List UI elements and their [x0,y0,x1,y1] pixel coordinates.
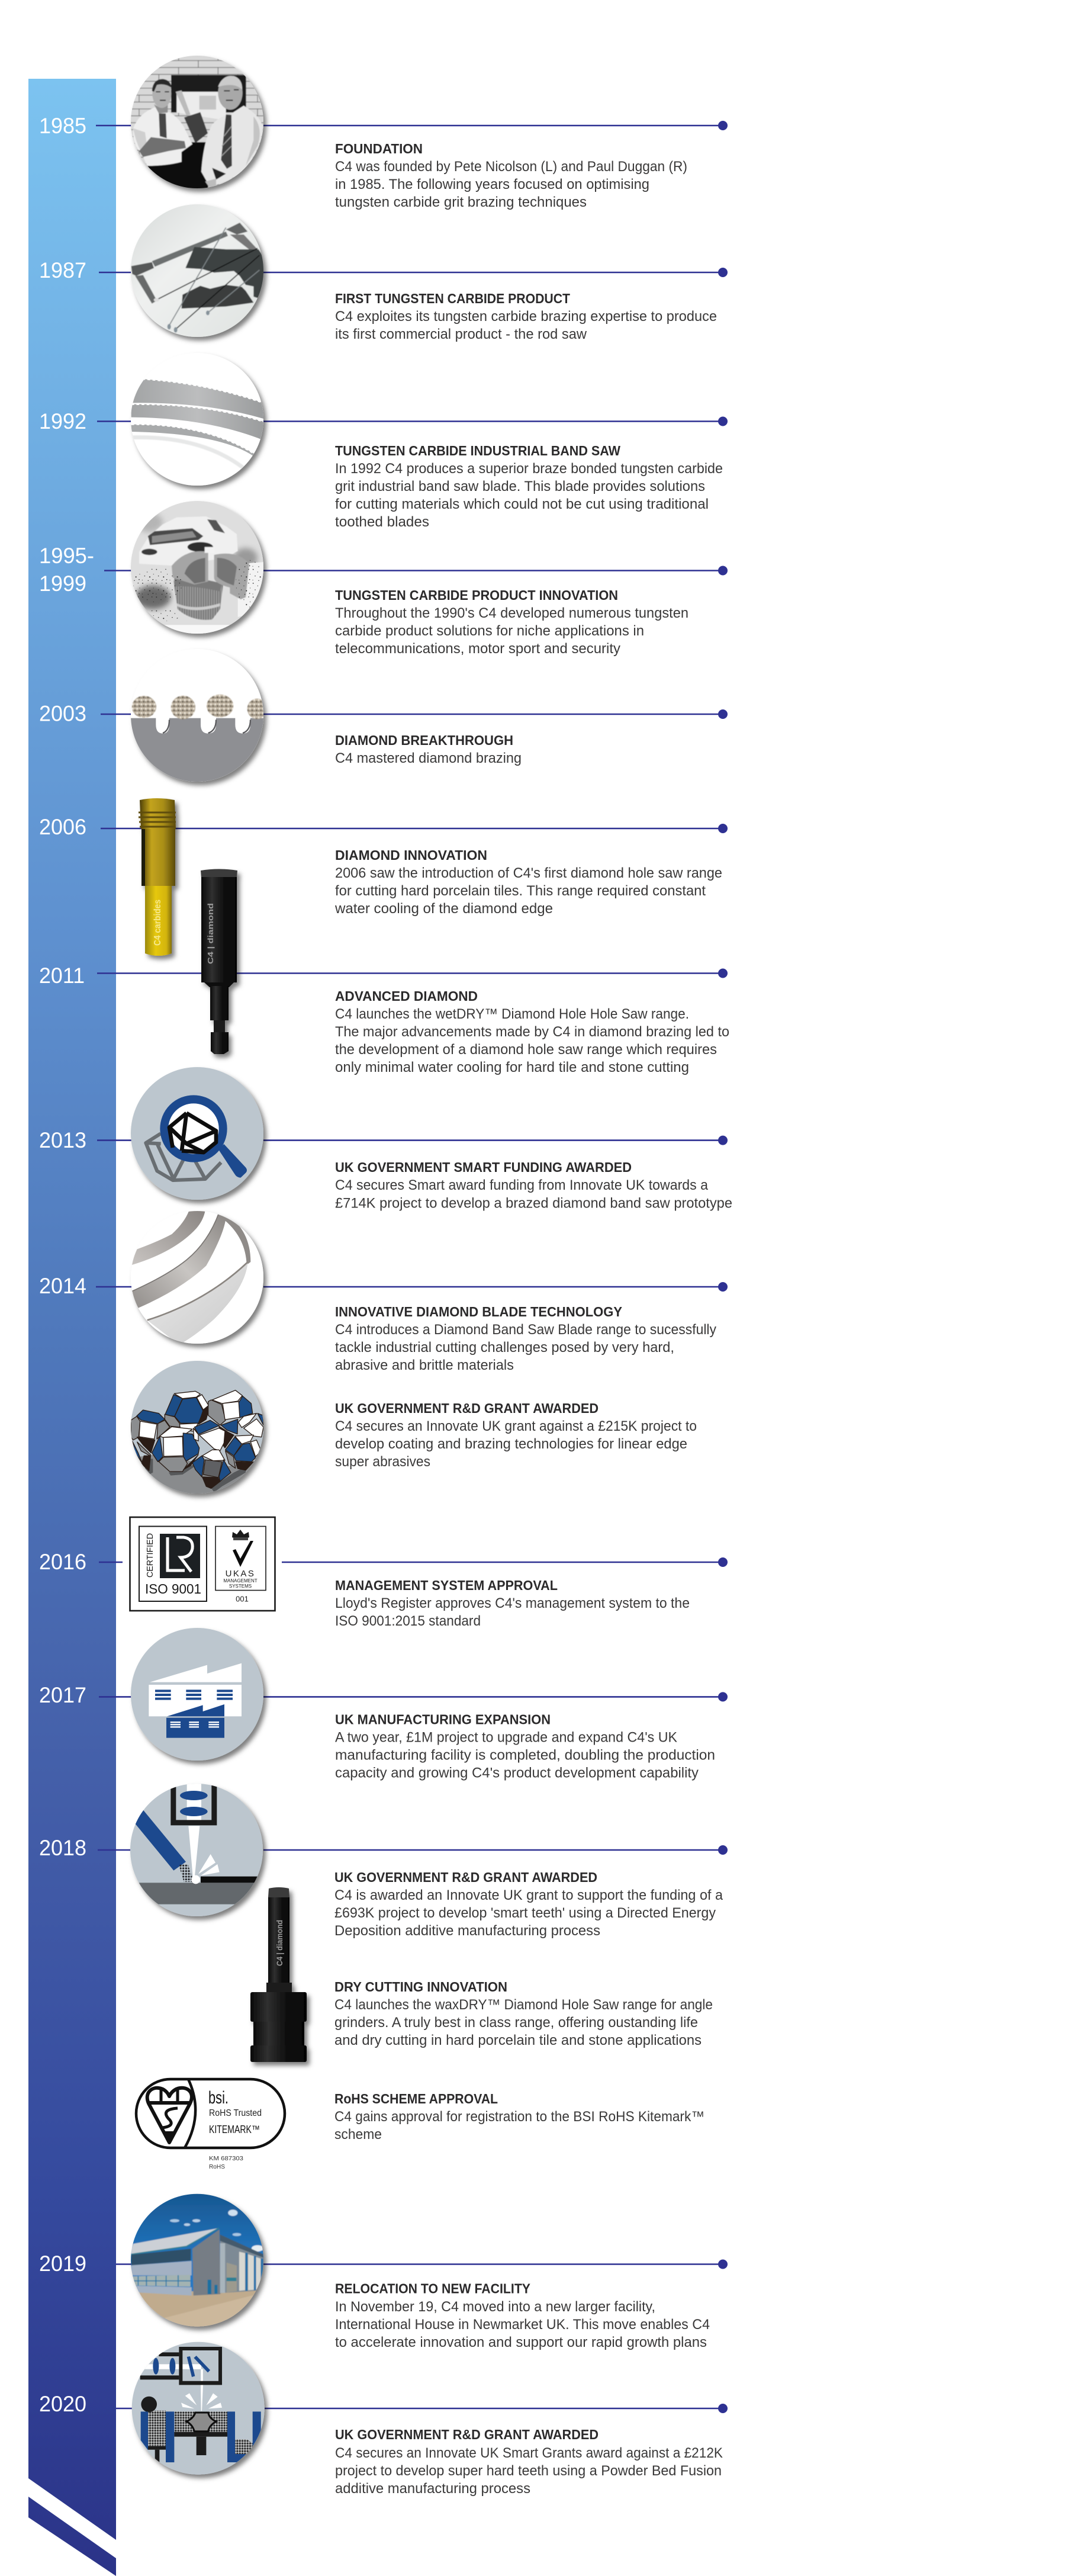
connector line 2013 [97,1136,728,1145]
body: C4 secures Smart award funding from Innovate UK towards a [335,1177,709,1193]
body [335,1418,697,1470]
body: in 1985. The following years focused on optimising [335,176,649,192]
body: ISO 9001:2015 standard [335,1613,481,1629]
icon: black diamond hole saw: C4 | diamond [206,903,215,964]
entry: 2006 diamond innovation [39,798,728,956]
body [335,1177,732,1212]
photo: founders [127,53,269,195]
entry: 1987 rod saw [39,202,728,344]
photo: International House building [127,2192,269,2334]
connector line 1987 [99,268,728,277]
body: Throughout the 1990's C4 developed numerous tungsten [335,605,688,621]
logo: UKAS: 001 [236,1594,249,1604]
body: project to develop super hard teeth using a Powder Bed Fusion [335,2463,722,2479]
entry: 2020 powder bed fusion [39,2340,728,2497]
body: manufacturing facility is completed, doubling the production [335,1747,715,1764]
connector line 2003 [101,709,728,719]
connector line 2017 [99,1692,728,1701]
year 2019: 2019 [39,2251,86,2276]
heading: UK GOVERNMENT R&D GRANT AWARDED [334,1870,597,1885]
text block: R&D grant super hard teeth [335,2427,723,2497]
photo: band saw blades [127,351,269,493]
logo: BSI RoHS Kitemark: KITEMARK™ [209,2124,260,2135]
logo: BSI RoHS Kitemark: RoHS Trusted [209,2108,262,2118]
logo: Lloyd's Register ISO 9001: CERTIFIED [146,1533,155,1578]
year 2020: 2020 [39,2392,86,2416]
heading: DIAMOND INNOVATION [335,847,487,863]
connector line 2019 [116,2260,728,2269]
heading: DIAMOND BREAKTHROUGH [335,733,513,748]
logo: UKAS: UKAS [226,1569,255,1579]
heading: RoHS SCHEME APPROVAL [334,2091,498,2106]
connector line 2014 [96,1282,728,1292]
body: telecommunications, motor sport and security [335,641,620,657]
body: for cutting hard porcelain tiles. This range required constant [335,883,706,899]
logo: UKAS [215,1527,266,1604]
heading: FOUNDATION [335,141,423,156]
body: grit industrial band saw blade. This blade provides solutions [335,478,705,494]
body: tackle industrial cutting challenges posed by very hard, [335,1340,674,1356]
body: The major advancements made by C4 in diamond brazing led to [335,1024,729,1040]
body: toothed blades [335,514,429,530]
connector line 1985 [96,121,728,130]
body: C4 introduces a Diamond Band Saw Blade range to sucessfully [335,1322,716,1338]
body: additive manufacturing process [335,2481,530,2497]
logo: UKAS: MANAGEMENT [223,1578,258,1583]
body: Deposition additive manufacturing process [334,1923,600,1939]
heading: TUNGSTEN CARBIDE INDUSTRIAL BAND SAW [335,443,621,458]
text block: diamond innovation [334,847,722,917]
body: International House in Newmarket UK. This move enables C4 [335,2317,710,2333]
connector line 2018 [98,1845,728,1855]
logo: BSI RoHS Kitemark: bsi. [208,2088,229,2108]
entry: 2013 smart funding [39,1065,732,1212]
text block: RoHS scheme approval [334,2091,704,2143]
year 2017: 2017 [39,1683,86,1707]
year 1995-1999 [39,544,94,596]
body: C4 secures an Innovate UK grant against a £215K project to [335,1418,697,1434]
body: super abrasives [335,1454,430,1470]
body: C4 launches the wetDRY™ Diamond Hole Hole Saw range. [335,1006,689,1022]
body: C4 is awarded an Innovate UK grant to support the funding of a [334,1887,723,1903]
year 1992: 1992 [39,409,86,433]
body: C4 mastered diamond brazing [335,750,522,766]
heading: UK MANUFACTURING EXPANSION [335,1711,551,1727]
text block: relocation [335,2281,710,2350]
entry: 2019 relocation [39,2192,728,2350]
entry: 2014 diamond blade technology [39,1209,728,1373]
logo: Lloyd's Register ISO 9001 [139,1527,207,1601]
body [335,2445,723,2497]
icon: waxDRY hole saw [250,1887,307,2062]
year 2014: 2014 [39,1274,86,1298]
body [334,1887,723,1939]
year 2016: 2016 [39,1550,86,1574]
icon: black diamond hole saw [201,869,237,1054]
text block: manufacturing expansion [335,1711,715,1781]
icon: diamond crystals [127,1354,269,1502]
text block: management system approval [335,1578,690,1629]
text block: diamond breakthrough [335,733,522,766]
year 1995-1999: 1999 [39,571,86,596]
body: tungsten carbide grit brazing techniques [335,194,587,210]
heading: MANAGEMENT SYSTEM APPROVAL [335,1578,558,1593]
body [335,309,717,342]
body: develop coating and brazing technologies for linear edge [335,1436,687,1452]
entry: 1985 foundation [39,53,728,210]
body: A two year, £1M project to upgrade and expand C4's UK [335,1729,677,1746]
year 2003: 2003 [39,701,86,726]
icon: powder bed fusion [128,2340,271,2482]
year 2006: 2006 [39,815,86,839]
text block: foundation [335,141,687,210]
heading: INNOVATIVE DIAMOND BLADE TECHNOLOGY [335,1304,622,1319]
entry: 2017 manufacturing expansion [39,1626,728,1781]
connector line 2011 [97,969,728,978]
connector line 2016 [99,1557,728,1567]
text block: R&D grant coating [335,1401,697,1470]
icon: directed energy deposition [127,1781,269,1923]
year 2018: 2018 [39,1836,86,1860]
year 2013: 2013 [39,1128,86,1152]
body: C4 secures an Innovate UK Smart Grants award against a £212K [335,2445,723,2461]
body [335,159,687,210]
body [334,1997,713,2048]
body: capacity and growing C4's product development capability [335,1765,699,1781]
year 1987: 1987 [39,258,86,282]
photo: diamond teeth [127,647,269,789]
heading: UK GOVERNMENT R&D GRANT AWARDED [335,2427,599,2442]
heading: FIRST TUNGSTEN CARBIDE PRODUCT [335,291,571,306]
text block: smart funding [335,1159,732,1212]
logo: UKAS: SYSTEMS [229,1583,252,1589]
connector line 2020 [116,2404,728,2413]
body: grinders. A truly best in class range, offering oustanding life [334,2015,698,2031]
connector line 1992 [97,417,728,426]
logo: BSI RoHS Kitemark: RoHS [209,2163,225,2170]
icon: waxDRY hole saw: C4 | diamond [275,1920,284,1966]
logo: Lloyd's Register ISO 9001: ISO 9001 [145,1581,201,1597]
text block: product innovation [335,587,688,657]
heading: ADVANCED DIAMOND [335,988,478,1004]
body: the development of a diamond hole saw range which requires [335,1042,717,1058]
body: £714K project to develop a brazed diamond band saw prototype [335,1195,732,1212]
heading: DRY CUTTING INNOVATION [334,1979,507,1994]
connector line 2006 [101,824,728,833]
entry: 2003 diamond breakthrough [39,647,728,789]
logo: BSI RoHS Kitemark [136,2079,285,2170]
heading: UK GOVERNMENT R&D GRANT AWARDED [335,1401,599,1416]
text block: first tungsten carbide product [335,291,717,342]
icon: gold diamond hole saw [139,798,176,956]
body [334,2109,704,2143]
body: In 1992 C4 produces a superior braze bonded tungsten carbide [335,461,723,477]
entry: 2016 management system approval [39,1517,728,1629]
heading: UK GOVERNMENT SMART FUNDING AWARDED [335,1159,632,1175]
body: C4 was founded by Pete Nicolson (L) and Paul Duggan (R) [335,159,687,175]
body [334,865,722,917]
body: £693K project to develop 'smart teeth' using a Directed Energy [334,1905,716,1921]
body: to accelerate innovation and support our rapid growth plans [335,2334,707,2350]
year 1995-1999: 1995- [39,544,94,568]
entry: 2018 [39,1781,728,2170]
logo: ISO 9001 and UKAS certification [130,1517,275,1611]
body [335,461,723,530]
body: C4 exploites its tungsten carbide brazing expertise to produce [335,309,717,325]
body [335,2299,710,2350]
logo: BSI RoHS Kitemark: KM 687303 [209,2155,243,2162]
text block: dry cutting innovation [334,1979,713,2048]
body: C4 launches the waxDRY™ Diamond Hole Saw range for angle [334,1997,713,2013]
body: abrasive and brittle materials [335,1357,514,1373]
body: carbide product solutions for niche applications in [335,623,644,639]
entry: 1992 band saw [39,351,728,530]
icon: gold diamond hole saw: C4 carbides [153,900,163,946]
body: only minimal water cooling for hard tile and stone cutting [335,1059,689,1075]
text block: advanced diamond [335,988,729,1075]
text block: diamond blade technology [335,1304,716,1373]
text block: industrial band saw [335,443,723,530]
connector line 1995 [104,566,728,576]
body: Lloyd's Register approves C4's management system to the [335,1595,690,1611]
heading: RELOCATION TO NEW FACILITY [335,2281,530,2296]
body: In November 19, C4 moved into a new larger facility, [335,2299,655,2315]
body: C4 gains approval for registration to the BSI RoHS Kitemark™ [334,2109,704,2125]
photo: car and cylinder part [127,499,269,641]
timeline bar [28,79,116,2576]
icon: magnifier over diamond [127,1065,269,1207]
entry: 2011 advanced diamond [39,869,729,1075]
body: water cooling of the diamond edge [334,901,553,917]
body: and dry cutting in hard porcelain tile and stone applications [334,2032,702,2048]
body: 2006 saw the introduction of C4's first diamond hole saw range [335,865,722,881]
text block: R&D grant smart teeth [334,1870,723,1939]
body [335,1322,716,1373]
body: for cutting materials which could not be cut using traditional [335,496,709,512]
body [335,605,688,657]
photo: diamond band saw blades [127,1209,269,1351]
photo: rod saw [127,202,269,344]
icon: factory [127,1626,269,1768]
body [335,1729,715,1781]
heading: TUNGSTEN CARBIDE PRODUCT INNOVATION [335,587,618,603]
body: scheme [334,2127,382,2143]
body [335,1595,690,1629]
body: its first commercial product - the rod saw [335,326,587,342]
entry: R&D grant crystals [127,1354,697,1502]
body [335,1006,729,1075]
year 1985: 1985 [39,114,86,138]
entry: 1995-1999 product innovation [39,499,728,657]
year 2011: 2011 [39,963,85,988]
